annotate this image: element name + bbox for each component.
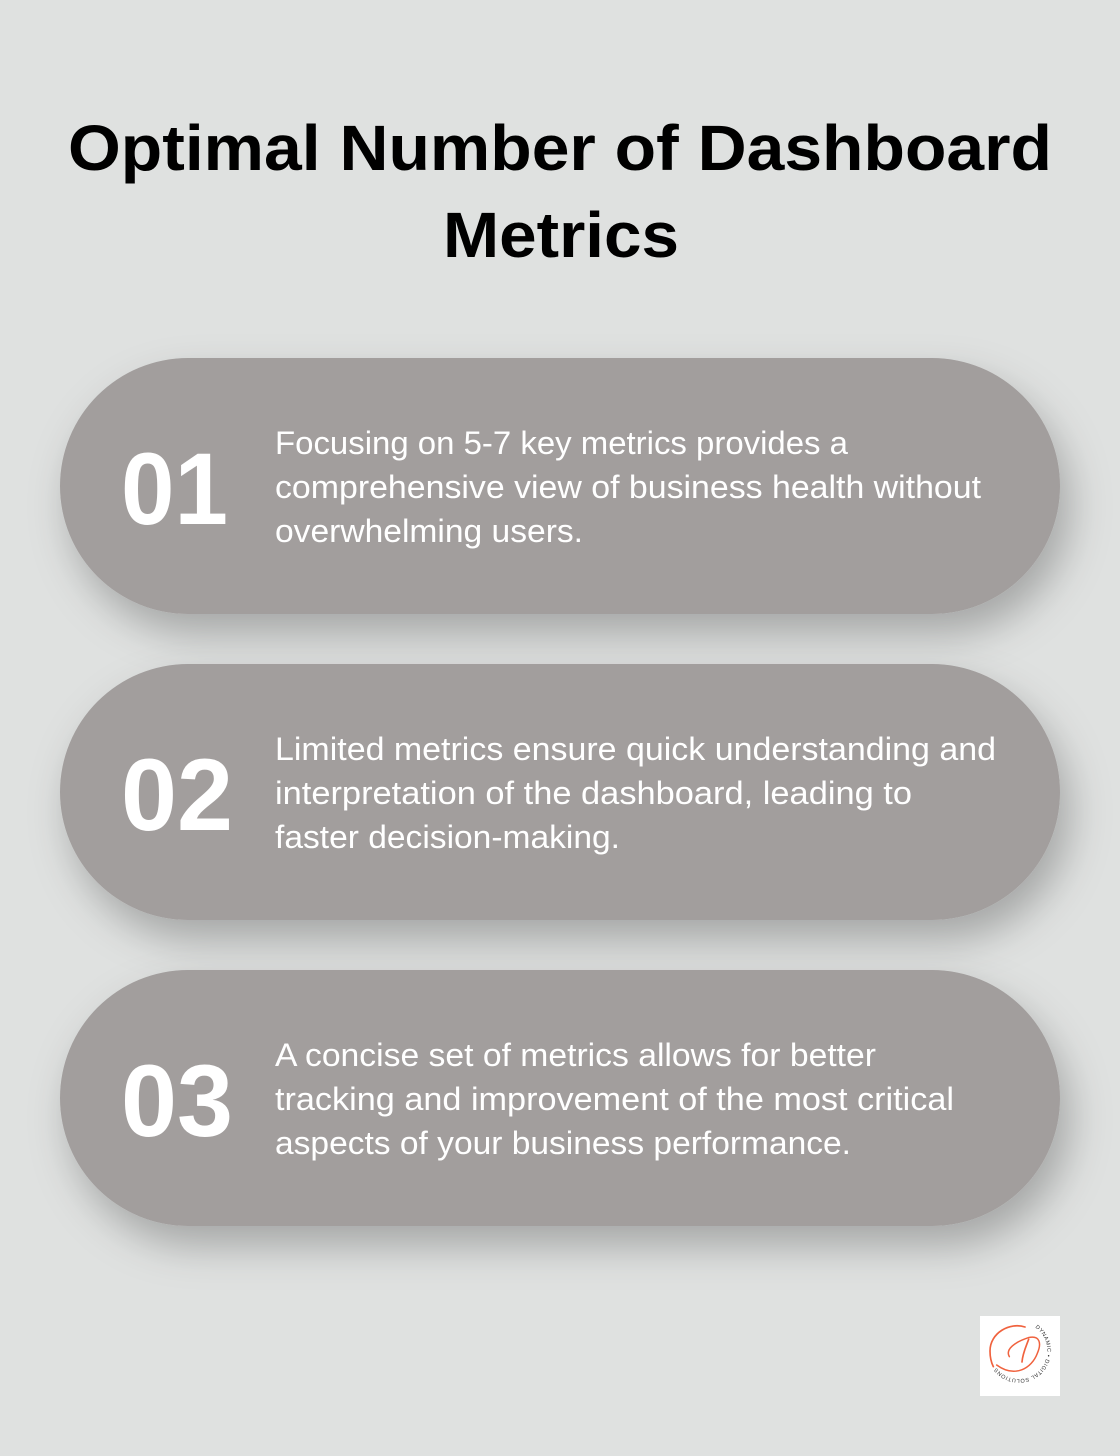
text block 03: tracking and improvement of the most critical: [275, 1081, 954, 1117]
pill 03: [60, 970, 1060, 1226]
text block 01: overwhelming users.: [275, 513, 583, 549]
logo background: [980, 1316, 1060, 1396]
text block 03: [275, 1037, 954, 1161]
number 02: 02: [121, 738, 233, 852]
title: [68, 112, 1052, 271]
logo: [980, 1316, 1060, 1396]
text block 02: Limited metrics ensure quick understanding and: [275, 731, 996, 767]
number 01: 01: [121, 432, 228, 546]
text block 01: Focusing on 5-7 key metrics provides a: [275, 425, 848, 461]
text block 01: [275, 425, 981, 549]
title: Optimal Number of Dashboard: [68, 112, 1052, 184]
panel: step 03: [60, 970, 1060, 1226]
title: Metrics: [443, 199, 679, 271]
pill 02: [60, 664, 1060, 920]
icon: orange circle and swirl: [990, 1326, 1040, 1371]
panel: step 01: [60, 358, 1060, 614]
number 03: 03: [121, 1044, 233, 1158]
pill 01: [60, 358, 1060, 614]
text block 02: faster decision-making.: [275, 819, 620, 855]
text block 01: comprehensive view of business health without: [275, 469, 981, 505]
logo ring text: DYNAMIC • DIGITAL SOLUTIONS: [994, 1324, 1052, 1383]
text block 02: [275, 731, 996, 855]
text block 03: aspects of your business performance.: [275, 1125, 851, 1161]
text block 03: A concise set of metrics allows for better: [275, 1037, 876, 1073]
panel: step 02: [60, 664, 1060, 920]
text block 02: interpretation of the dashboard, leading to: [275, 775, 912, 811]
